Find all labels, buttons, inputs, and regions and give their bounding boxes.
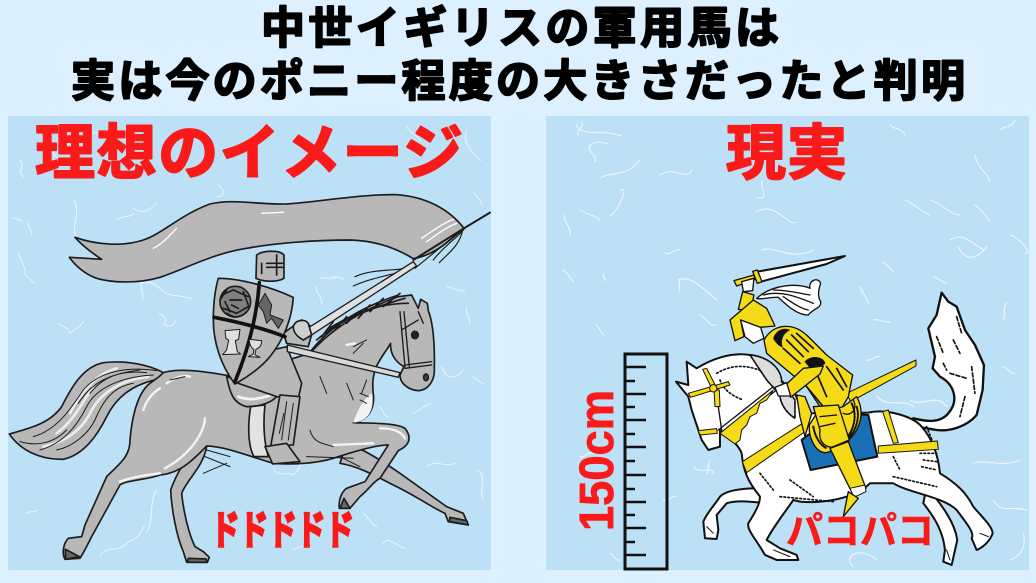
shading hatches — [170, 340, 368, 473]
title — [71, 4, 965, 106]
raised arm — [738, 292, 754, 311]
sound effect: pakopako: パコパコ — [786, 511, 934, 553]
forward arm — [787, 366, 823, 397]
tail — [9, 362, 163, 459]
label: 150cm: 150cm — [571, 390, 624, 531]
foot — [843, 492, 858, 517]
knight arm — [283, 320, 313, 347]
blue saddle cloth — [802, 413, 877, 470]
white chest patch — [353, 393, 373, 423]
scalloped neck cloth — [720, 390, 773, 444]
blade — [757, 256, 845, 282]
heading: ideal: 理想のイメージ — [35, 120, 463, 187]
saddle curve and holster — [797, 395, 861, 453]
horse body — [676, 354, 993, 560]
panel: ideal image — [8, 116, 491, 570]
armour details — [773, 329, 790, 347]
breast strap — [742, 422, 805, 473]
lion — [220, 286, 251, 317]
white highlights — [120, 343, 405, 482]
gauntlet — [293, 320, 312, 340]
title: 中世イギリスの軍用馬は — [261, 4, 779, 53]
lower lance — [287, 345, 400, 377]
raised foreleg — [703, 488, 767, 539]
feather plume — [757, 280, 821, 315]
pauldron — [805, 357, 825, 372]
helmet — [256, 251, 284, 281]
knight leg — [233, 347, 302, 398]
banner — [69, 195, 464, 282]
girth — [249, 405, 268, 457]
hilt — [734, 270, 762, 286]
scabbard — [847, 360, 916, 402]
saddle skirt — [227, 377, 278, 407]
hoof — [65, 498, 468, 562]
panel: reality — [546, 116, 1029, 570]
rearing horse emblem — [258, 293, 283, 328]
lance shaft — [305, 262, 417, 335]
paper fibre texture — [563, 120, 1027, 567]
illustration: golden knight on white horse — [676, 256, 993, 565]
paper fibre texture — [13, 127, 483, 557]
hand — [742, 278, 754, 292]
chalice emblem — [248, 339, 262, 357]
horse shading stipple — [717, 366, 937, 502]
thigh — [813, 405, 849, 447]
mane hatching — [312, 293, 408, 350]
bridle — [688, 368, 777, 435]
tail — [910, 293, 984, 430]
far hind leg — [923, 487, 957, 565]
rear straps — [878, 410, 938, 453]
lance and pennon ties — [353, 213, 490, 286]
heading: reality: 現実 — [726, 120, 847, 187]
face — [741, 320, 764, 343]
sound effect: dododo: ドドドドド — [211, 509, 354, 553]
lower leg — [830, 442, 866, 497]
bridle and eye — [400, 312, 432, 368]
tower emblem — [223, 329, 241, 355]
far hind leg — [171, 443, 209, 562]
hand on reins — [775, 383, 791, 396]
far foreleg — [340, 443, 468, 525]
hoof marks — [707, 527, 988, 560]
ruler — [625, 354, 667, 569]
torso armour — [764, 326, 853, 417]
mane — [750, 355, 795, 418]
illustration: armored knight on gray horse — [9, 195, 490, 562]
hood — [730, 300, 775, 341]
horse body — [63, 293, 468, 562]
shield with coat of arms — [213, 278, 293, 384]
title: 実は今のポニー程度の大きさだったと判明 — [71, 57, 965, 106]
